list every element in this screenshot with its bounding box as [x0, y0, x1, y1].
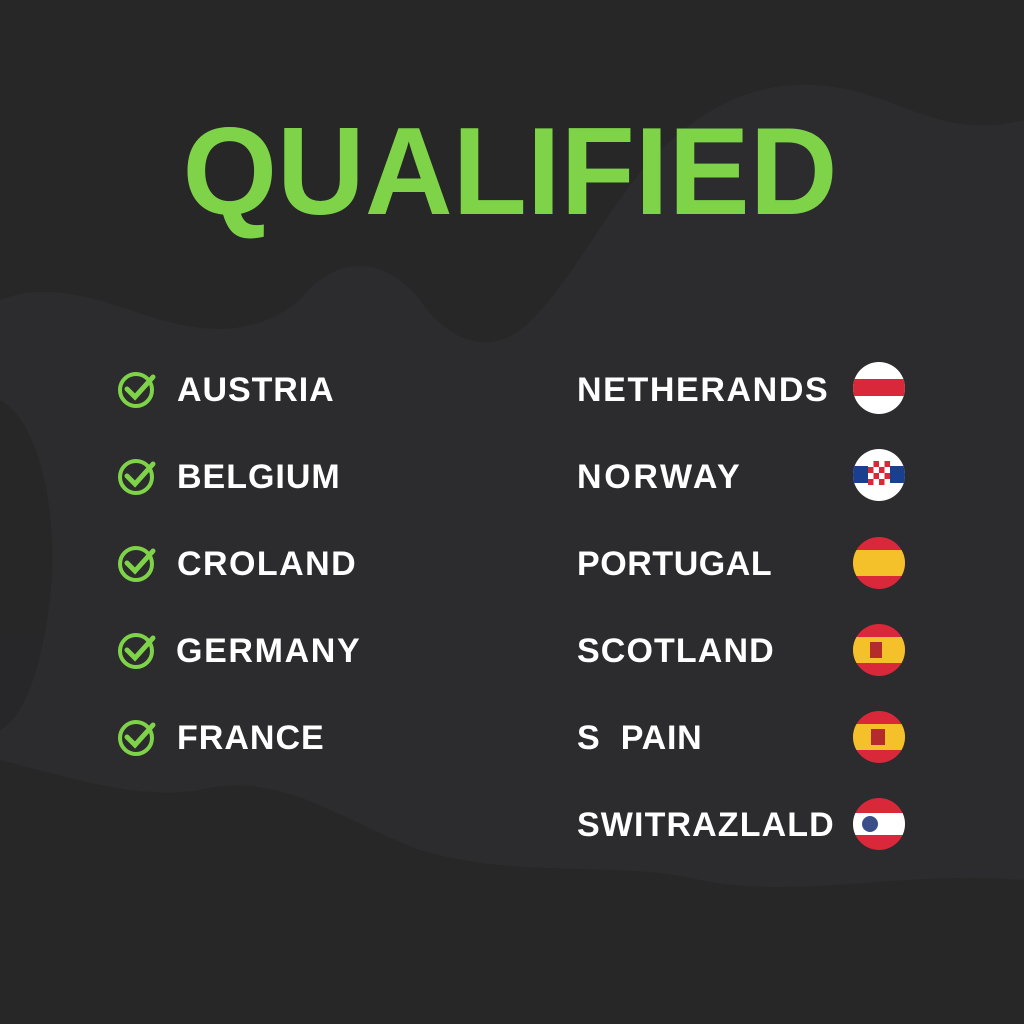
item: Portugal: PORTUGAL	[577, 545, 773, 583]
item: Croland: CROLAND	[177, 545, 357, 583]
item: Netherands	[577, 362, 905, 414]
item: Germany: GERMANY	[176, 632, 361, 670]
title: QUALIFIED	[182, 103, 838, 241]
item: Belgium: BELGIUM	[177, 458, 341, 496]
item: Netherands: NETHERANDS	[577, 371, 829, 409]
item: France: FRANCE	[177, 719, 325, 757]
item: Switrazlald	[577, 798, 905, 850]
item: Spain	[577, 711, 905, 763]
item: Scotland: SCOTLAND	[577, 632, 775, 670]
item: Scotland	[577, 624, 905, 676]
item: Portugal	[577, 537, 905, 589]
item: Norway	[577, 449, 905, 501]
item: Austria: AUSTRIA	[177, 371, 335, 409]
item: Spain: S PAIN	[577, 719, 703, 757]
item: Norway: NORWAY	[577, 458, 741, 496]
right list	[577, 362, 905, 850]
left list	[120, 371, 361, 757]
item: Switrazlald: SWITRAZLALD	[577, 806, 835, 844]
